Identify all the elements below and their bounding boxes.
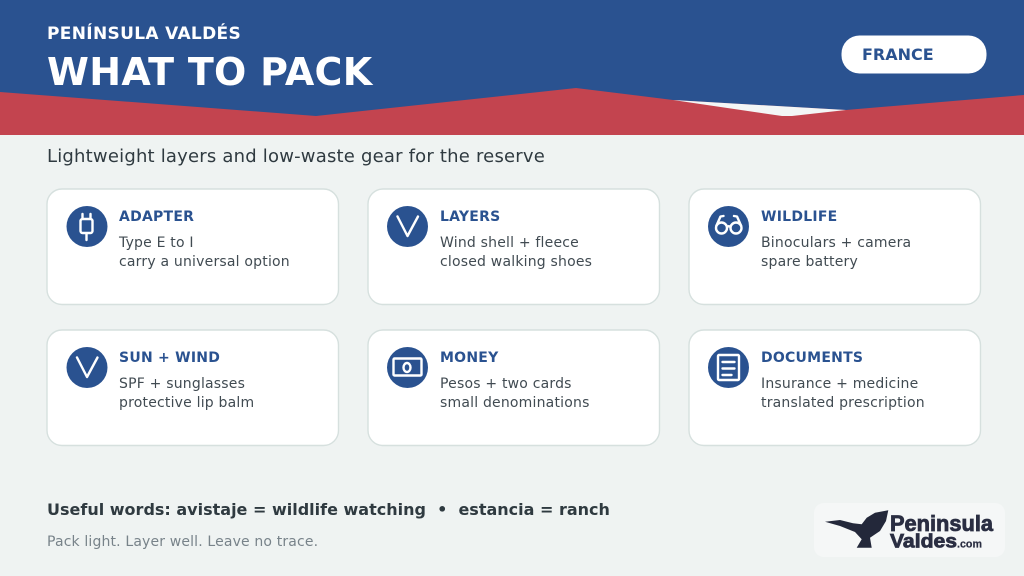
adapter text: Type E to I xyxy=(118,235,194,251)
useful words: Useful words: avistaje = wildlife watching • estancia = ranch xyxy=(47,500,610,519)
adapter text: carry a universal option xyxy=(119,254,290,270)
money text: MONEY xyxy=(440,350,499,366)
country badge xyxy=(842,36,986,74)
tagline: Pack light. Layer well. Leave no trace. xyxy=(47,534,318,550)
layers text: Wind shell + fleece xyxy=(440,235,579,251)
icon: sun v xyxy=(66,347,108,388)
title: WHAT TO PACK xyxy=(47,50,374,94)
icon: document xyxy=(708,347,749,388)
panel: layers xyxy=(368,189,660,304)
logo wordmark: Valdes xyxy=(890,530,957,552)
wildlife text xyxy=(761,209,911,270)
layers text: LAYERS xyxy=(440,209,500,225)
logo xyxy=(814,503,1005,557)
wildlife text: Binoculars + camera xyxy=(761,235,911,251)
adapter text: ADAPTER xyxy=(119,209,194,225)
sun and wind text: protective lip balm xyxy=(119,395,254,411)
logo wordmark: Peninsula xyxy=(890,511,994,536)
panel: money xyxy=(368,330,660,446)
panel: documents xyxy=(689,330,980,446)
icon: whale tail xyxy=(825,510,888,548)
sun and wind text xyxy=(119,350,254,411)
documents text: Insurance + medicine xyxy=(761,376,918,392)
documents text xyxy=(761,350,925,411)
icon: layers v xyxy=(387,206,428,247)
documents text: translated prescription xyxy=(761,395,925,411)
header banner xyxy=(0,0,1024,135)
logo wordmark: .com xyxy=(957,538,982,550)
panel: adapter xyxy=(47,189,338,304)
icon: banknote xyxy=(387,347,428,388)
subtitle: Lightweight layers and low-waste gear for the reserve xyxy=(47,146,545,167)
money text: small denominations xyxy=(440,395,590,411)
wildlife text: WILDLIFE xyxy=(761,209,837,225)
icon: binoculars xyxy=(708,206,749,247)
sun and wind text: SUN + WIND xyxy=(119,350,220,366)
layers text: closed walking shoes xyxy=(440,254,592,270)
money text xyxy=(440,350,590,411)
layers text xyxy=(440,209,592,270)
documents text: DOCUMENTS xyxy=(761,350,863,366)
eyebrow heading: PENÍNSULA VALDÉS xyxy=(47,22,241,44)
adapter text xyxy=(118,209,290,270)
panel: sun and wind xyxy=(47,330,338,446)
panel: wildlife xyxy=(689,189,980,304)
sun and wind text: SPF + sunglasses xyxy=(119,376,245,392)
wildlife text: spare battery xyxy=(761,254,858,270)
money text: Pesos + two cards xyxy=(440,376,572,392)
logo wordmark xyxy=(890,511,994,552)
country badge: FRANCE xyxy=(862,45,934,64)
icon: plug xyxy=(66,206,108,247)
